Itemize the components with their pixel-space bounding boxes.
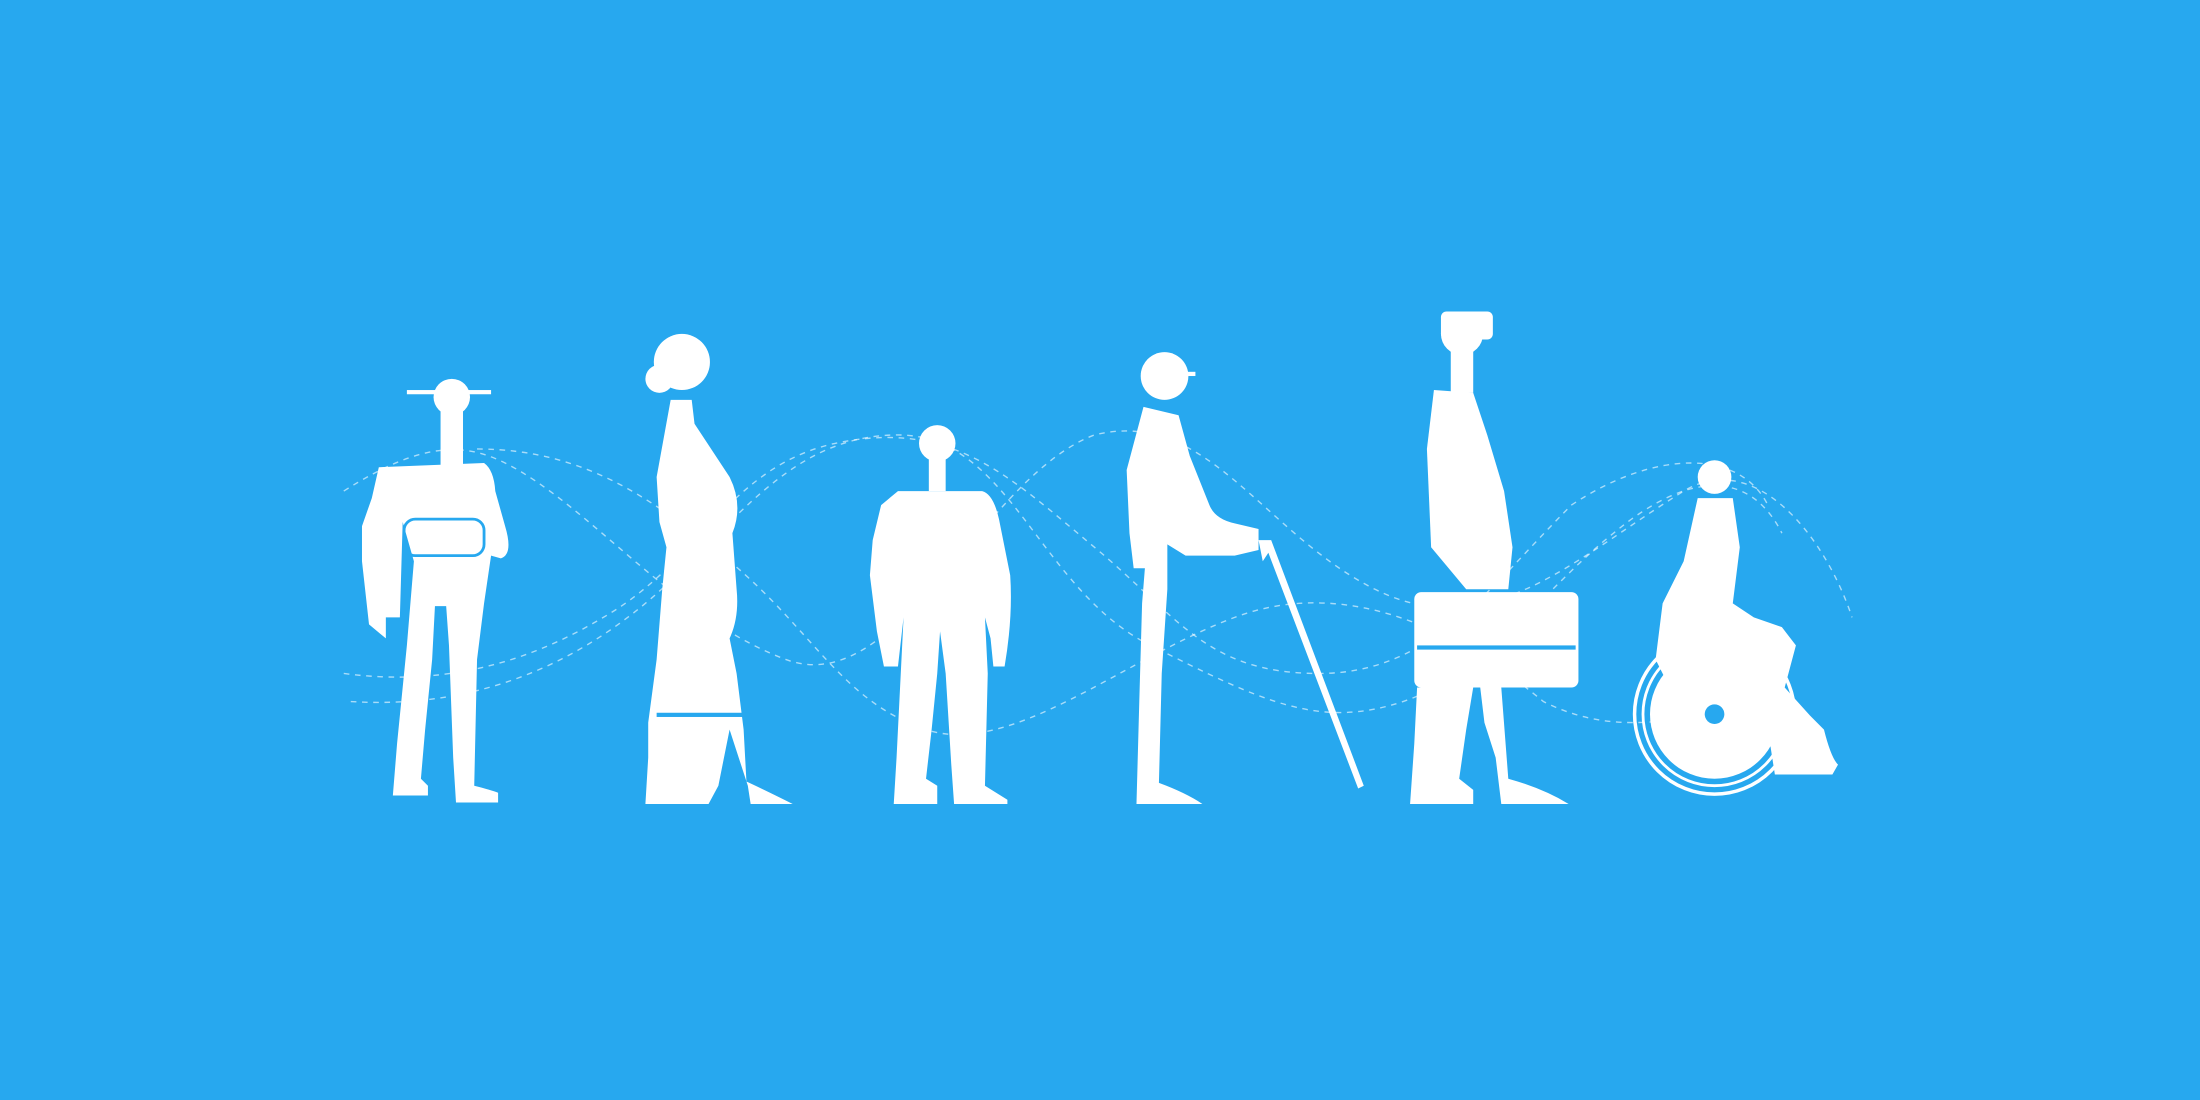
figure: middle man	[870, 425, 1011, 804]
figure: person in wheelchair	[1635, 460, 1838, 794]
figure: man with cap and arm sling	[362, 379, 508, 803]
figure: man with briefcase	[1410, 311, 1578, 804]
figure: woman with curly hair	[645, 334, 793, 804]
figure: elderly man with cane	[1127, 352, 1364, 804]
